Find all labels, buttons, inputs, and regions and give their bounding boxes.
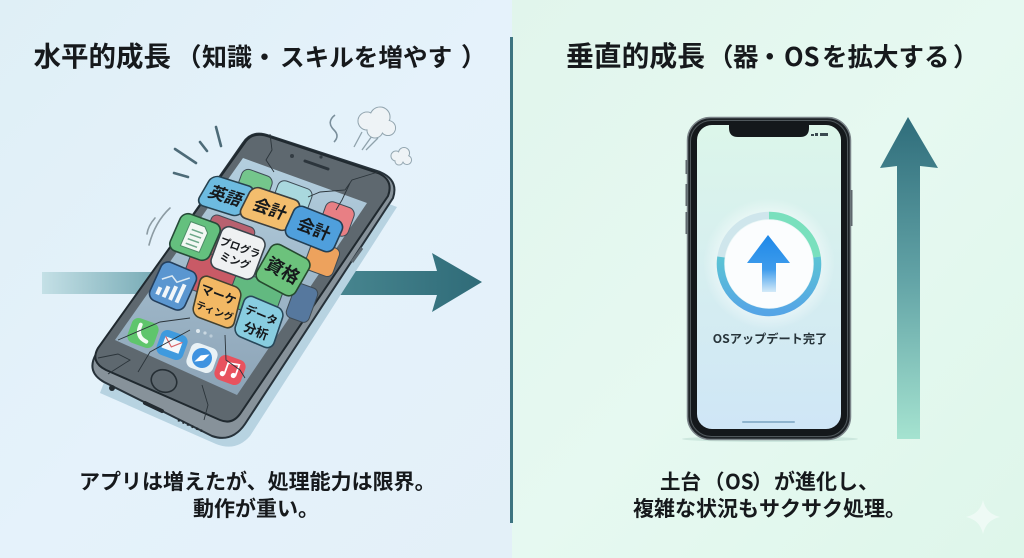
update arrow (747, 235, 790, 292)
app tile: 英語: 英語 (204, 179, 249, 211)
caption: horizontal growth: アプリは増えたが、処理能力は限界。 (79, 466, 436, 496)
update glow (703, 198, 835, 330)
heading: vertical growth: 垂直的成長 (566, 35, 705, 75)
side buttons (686, 160, 852, 234)
dock icon: compass (184, 341, 220, 375)
panel: horizontal growth background (0, 0, 512, 558)
app tile: プログラミング: プログラ (218, 234, 262, 262)
caption: vertical growth: 土台 (660, 465, 701, 495)
heading: vertical growth: （ (708, 37, 734, 74)
update label: OSアップデート完了 (713, 329, 827, 347)
phone shadow (682, 436, 858, 442)
app tile: プログラミング (209, 224, 267, 282)
dock icon: music (212, 353, 248, 387)
arrow: horizontal growth (42, 253, 482, 312)
phone shadow (100, 170, 397, 447)
app tile: 会計 orange: 会計 (249, 191, 292, 224)
illustration: overloaded tilted phone (92, 134, 397, 447)
app tile: データ分析: 分析 (241, 316, 271, 344)
heading: vertical growth: ・ (757, 37, 783, 74)
heading: horizontal growth: ） (461, 37, 487, 74)
caption: vertical growth: （ (704, 465, 724, 495)
caption: horizontal growth: 動作が重い。 (193, 493, 319, 523)
app tile: マーケティング: マーケ (199, 279, 239, 310)
app tile: 会計 blue (283, 204, 345, 254)
heading: vertical growth: を拡大する (822, 37, 950, 74)
heading: horizontal growth: 水平的成長 (34, 34, 171, 74)
caption: horizontal growth (79, 466, 436, 523)
heading: vertical growth: 器 (733, 37, 759, 74)
dock icon: phone (125, 316, 161, 350)
center divider (510, 37, 513, 523)
earpiece and camera (290, 154, 328, 169)
app tile: 会計 orange (238, 186, 302, 232)
caption: vertical growth: が進化し、 (774, 466, 879, 496)
caption: vertical growth: 複雑な状況もサクサク処理。 (633, 493, 906, 523)
app tile: document (167, 211, 223, 263)
status icons (811, 133, 828, 136)
phone front face (95, 135, 390, 422)
arrow: vertical growth (880, 117, 938, 439)
dock icon: mail (154, 328, 190, 362)
inner disc (725, 220, 813, 308)
progress ring (720, 216, 818, 312)
side buttons (352, 248, 362, 262)
speaker and port (109, 385, 202, 431)
phone screen (115, 158, 367, 395)
heading: horizontal growth: （ (176, 37, 202, 74)
caption: vertical growth: OS (725, 465, 754, 495)
heading: vertical growth: OS (784, 37, 820, 74)
hidden background apps (180, 167, 356, 324)
heading: horizontal growth: ・ (252, 38, 277, 74)
app tile: データ分析 (233, 294, 285, 350)
phone body (688, 118, 850, 440)
heading: horizontal growth: 知識 (202, 38, 252, 74)
stress burst lines (147, 127, 221, 245)
sparkle mark (966, 500, 1000, 534)
steam clouds (330, 107, 412, 165)
app tile: プログラミング: ミング (218, 249, 253, 274)
caption: vertical growth: ） (752, 465, 772, 495)
app tile: マーケティング (192, 274, 242, 330)
home button (148, 366, 180, 396)
panel: vertical growth background (512, 0, 1024, 558)
app tile: 資格 (253, 241, 313, 299)
app tile: 英語 (196, 174, 256, 218)
cracks (98, 134, 378, 420)
caption: vertical growth (633, 465, 906, 523)
app tile: データ分析: データ (243, 301, 280, 330)
heading: horizontal growth: スキルを増やす (280, 38, 452, 74)
illustration: updated phone (682, 118, 858, 442)
page dots (196, 329, 213, 338)
app tile: マーケティング: ティング (195, 296, 235, 324)
phone screen (697, 125, 841, 429)
app tile: chart (147, 259, 199, 313)
notch (729, 125, 809, 137)
app tile: 会計 blue: 会計 (294, 210, 336, 245)
home indicator (742, 421, 795, 423)
app tile: 資格: 資格 (261, 250, 305, 290)
heading: vertical growth: ） (953, 37, 979, 74)
phone body (92, 134, 394, 438)
